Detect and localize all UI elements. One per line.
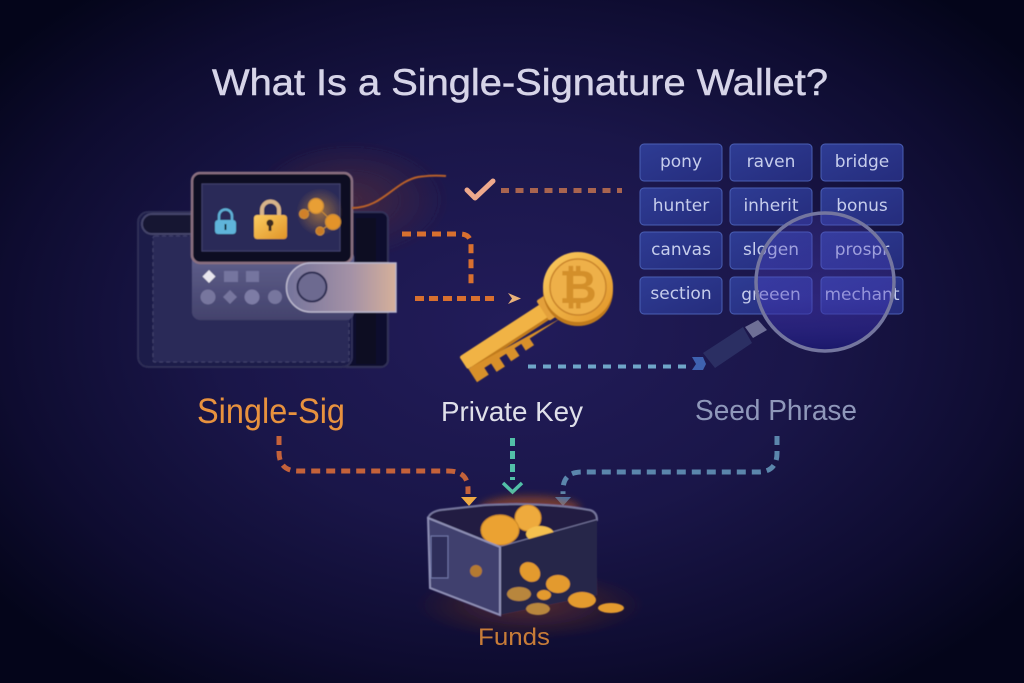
- arrow: check to phrase: [501, 188, 622, 193]
- check mark: [467, 181, 493, 198]
- icon: bitcoin key: ₿: [559, 261, 597, 313]
- wallet interior: [428, 504, 597, 547]
- seed words: pony: [660, 152, 702, 172]
- seed words: mechant: [824, 285, 900, 305]
- panel: funds wallet: [415, 496, 645, 640]
- seed words: hunter: [653, 196, 709, 216]
- label: Private Key: Private Key: [441, 396, 583, 427]
- wallet back: [340, 212, 388, 367]
- spilling coins: [507, 558, 624, 615]
- arrow: single-sig to funds: [279, 436, 477, 506]
- magnifying glass: [692, 213, 894, 370]
- icon: coin network: [296, 188, 344, 236]
- seed words: prospr: [835, 240, 889, 260]
- icon: small blue lock: [215, 210, 236, 234]
- seed words: bonus: [836, 196, 888, 216]
- label: Seed Phrase: Seed Phrase: [695, 395, 857, 427]
- orange swoosh: [352, 176, 446, 208]
- arrow: magnifier to key: [528, 364, 692, 368]
- device screen: [192, 173, 352, 263]
- key shadow: [463, 297, 561, 370]
- key teeth: [468, 311, 567, 384]
- wallet front flap: [428, 518, 500, 615]
- icon: gold lock: [254, 202, 287, 239]
- wallet right side: [500, 520, 597, 615]
- panel: seed phrase grid: [640, 144, 903, 314]
- arrow: seed phrase to funds: [555, 436, 777, 506]
- USB slider: [286, 263, 396, 312]
- device body: [192, 250, 354, 320]
- label: Funds: Funds: [478, 624, 550, 651]
- seed words: greeen: [741, 285, 801, 305]
- seed word tiles: [640, 144, 903, 314]
- arrow: private key to funds: [503, 438, 522, 492]
- arrow: device to key upper: [402, 234, 471, 287]
- seed words: section: [650, 284, 712, 304]
- seed words: slogen: [743, 240, 799, 260]
- seed words: [650, 152, 900, 305]
- label: Single-Sig: Single-Sig: [197, 392, 345, 431]
- seed words: inherit: [743, 196, 799, 216]
- panel: hardware wallet: [138, 140, 450, 367]
- device buttons: [200, 270, 282, 304]
- title: What Is a Single-Signature Wallet?: [212, 62, 828, 103]
- arrow: device to key lower: [415, 293, 521, 304]
- icon: bitcoin key: [457, 252, 613, 384]
- key shaft: [459, 298, 557, 369]
- coins in wallet: [481, 505, 554, 545]
- seed words: canvas: [651, 240, 711, 260]
- seed words: raven: [747, 152, 795, 172]
- wallet body: [138, 212, 352, 367]
- seed words: bridge: [835, 152, 889, 172]
